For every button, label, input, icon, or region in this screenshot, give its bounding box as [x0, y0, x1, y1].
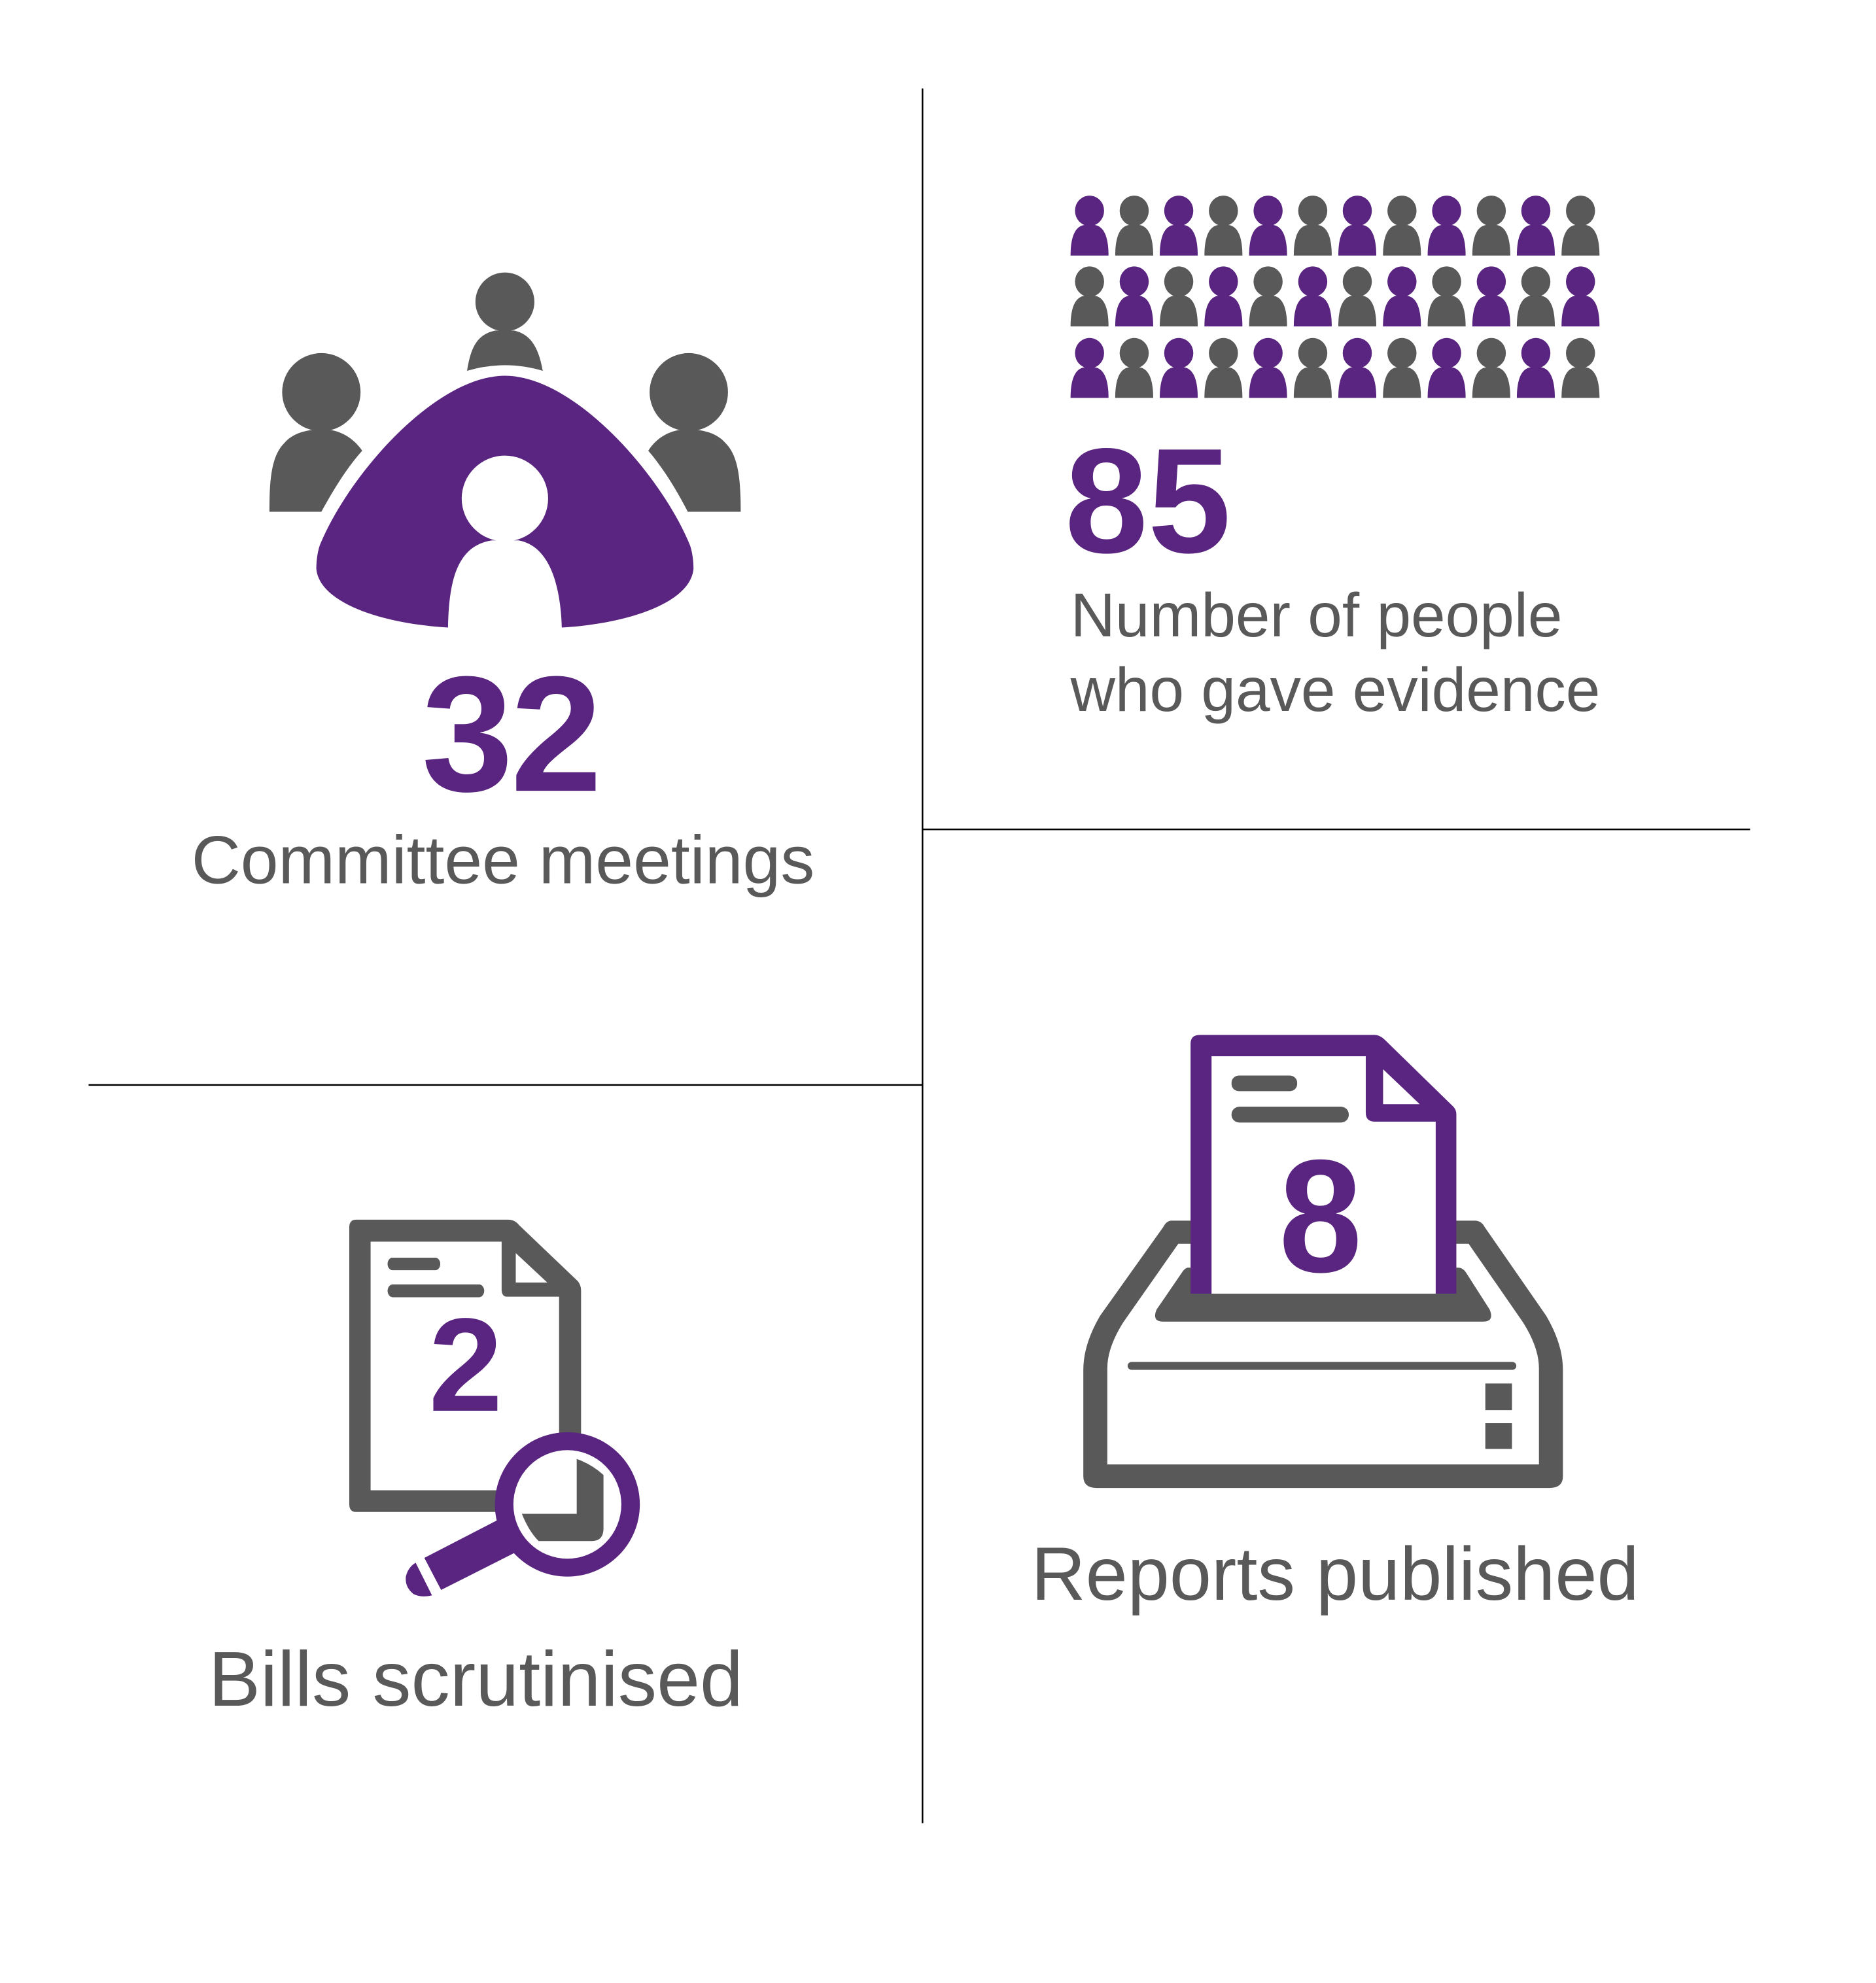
number: 2: 2	[428, 1291, 502, 1440]
panel: committee meetings	[192, 273, 814, 898]
table	[317, 376, 693, 628]
panel: people who gave evidence	[1065, 196, 1600, 725]
row 3	[1071, 338, 1599, 398]
label: committee meetings: Committee meetings	[192, 822, 814, 898]
number: 85: 85	[1065, 417, 1231, 584]
left person	[269, 353, 362, 512]
near person cut-out	[448, 456, 562, 629]
magnifying glass	[406, 1432, 640, 1596]
icon: document in printer tray	[1083, 1035, 1563, 1488]
label: number of people who gave evidence	[1070, 581, 1600, 725]
document	[349, 1220, 581, 1512]
number: 32: 32	[422, 642, 600, 826]
panel: reports published	[1031, 1035, 1639, 1616]
document	[1190, 1035, 1456, 1294]
number: 8: 8	[1279, 1127, 1362, 1306]
row 2	[1071, 266, 1599, 326]
printer	[1083, 1220, 1563, 1488]
panel: bills scrutinised	[209, 1220, 743, 1723]
label: reports published: Reports published	[1031, 1532, 1639, 1616]
label: number of people who gave evidence: who gave evidence	[1070, 655, 1600, 725]
icon: people around a table	[269, 273, 740, 629]
right person	[648, 353, 740, 512]
icon: rows of people	[1071, 196, 1599, 398]
row 1	[1071, 196, 1599, 256]
icon: document with magnifying glass	[349, 1220, 640, 1596]
label: number of people who gave evidence: Number of people	[1071, 581, 1562, 650]
label: bills scrutinised: Bills scrutinised	[209, 1636, 743, 1723]
far person	[467, 273, 543, 371]
